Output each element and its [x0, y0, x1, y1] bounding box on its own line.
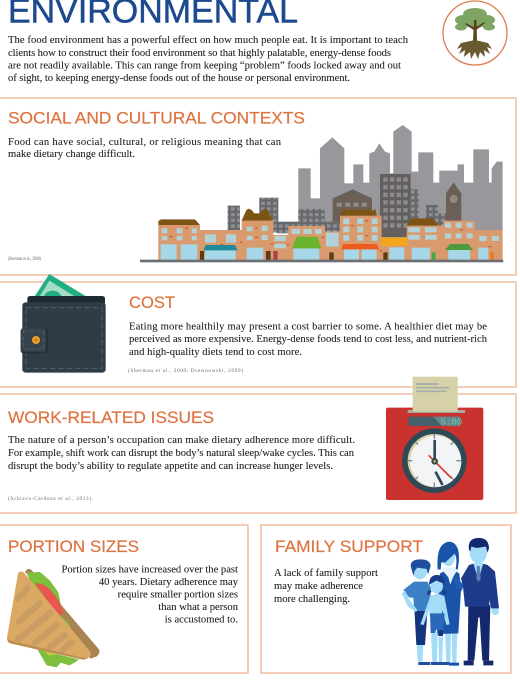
portion text: 40 years. Dietary adherence may [99, 577, 239, 588]
panel: family support [261, 525, 511, 673]
intro text: of sight, to keeping energy-dense foods out of the house or personal environment. [8, 73, 350, 84]
work text: disrupt the body’s ability to regulate appetite and can increase hunger levels. [8, 461, 333, 472]
cost text [129, 322, 488, 358]
work text: For example, shift work can disrupt the body’s natural sleep/wake cycles. This can [8, 448, 355, 459]
cost text: and high-quality diets tend to cost more. [129, 347, 302, 358]
panel: cost [0, 274, 516, 387]
portion text: Portion sizes have increased over the past [61, 564, 238, 576]
icon: sandwich [7, 569, 99, 667]
intro text: The food environment has a powerful effect on how much people eat. It is important to teach [8, 35, 409, 46]
panel: work-related issues [0, 394, 516, 513]
father [461, 538, 499, 665]
work citation: (Schiavo-Cardozo et al., 2013). [8, 495, 93, 502]
cost text: Eating more healthily may present a cost barrier to some. A healthier diet may be [129, 322, 487, 332]
portion text: require smaller portion sizes [118, 590, 238, 600]
cost citation: (Sherman et al., 2000; Drewnowski, 2009) [128, 367, 243, 374]
girl [420, 575, 450, 665]
heading: social and cultural contexts: SOCIAL AND CULTURAL CONTEXTS [8, 110, 305, 128]
panel: portion sizes [0, 525, 248, 673]
intro text: clients how to construct their food environment so that highly palatable, energy-dense foods [8, 48, 391, 59]
social citation: (Sherman et al., 2000) [8, 255, 41, 262]
portion text [61, 564, 239, 626]
cost text: perceived as more expensive. Energy-dense foods tend to cost less, and nutrient-rich [129, 334, 488, 345]
heading: portion sizes: PORTION SIZES [8, 538, 139, 556]
family text: A lack of family support [274, 568, 378, 579]
work text [8, 435, 355, 472]
family text: may make adherence [274, 581, 363, 592]
intro text [8, 35, 409, 84]
intro text: are not readily available. This can range from keeping “problem” foods locked away and out [8, 60, 401, 72]
icon: punch clock: 5:00 [441, 417, 462, 427]
heading: work-related issues: WORK-RELATED ISSUES [8, 409, 214, 427]
mother [437, 542, 464, 666]
boy [402, 559, 431, 665]
social text: Food can have social, cultural, or religious meaning that can [8, 137, 282, 148]
icon: punch clock [386, 377, 483, 500]
icon: wallet with banknote [21, 274, 106, 373]
portion text: than what a person [158, 602, 239, 613]
family text [274, 568, 378, 605]
work text: The nature of a person’s occupation can make dietary adherence more difficult. [8, 435, 355, 446]
illustration: family [402, 538, 499, 666]
social text: make dietary change difficult. [8, 149, 135, 160]
social text [8, 137, 282, 160]
illustration: city skyline and shops [140, 125, 503, 262]
icon: tree logo [443, 1, 507, 65]
heading: family support: FAMILY SUPPORT [275, 538, 423, 556]
panel: social and cultural contexts [0, 98, 516, 275]
family text: more challenging. [274, 594, 350, 605]
heading: cost: COST [129, 294, 175, 312]
portion text: is accustomed to. [165, 614, 238, 626]
